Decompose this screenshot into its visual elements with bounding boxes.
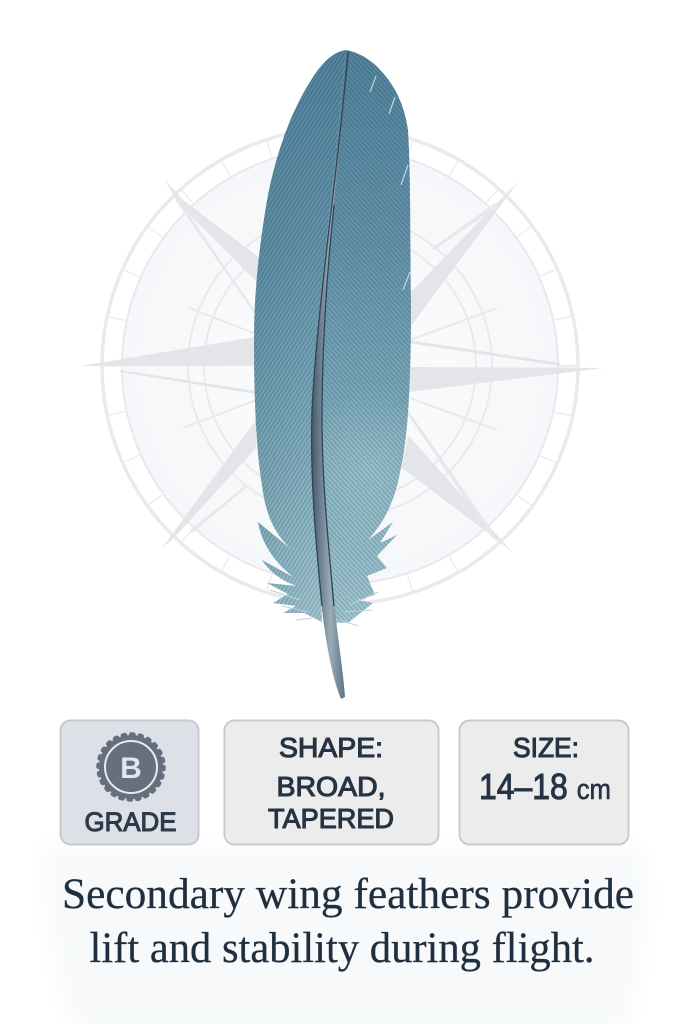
panel: grade card (60, 720, 198, 844)
size text: 14–18 cm (479, 766, 611, 807)
shape text: TAPERED (268, 803, 394, 834)
compass northwest point (165, 180, 262, 318)
caption text: lift and stability during flight. (90, 925, 594, 972)
compass disc (122, 148, 558, 584)
feather illustration (254, 50, 411, 699)
shape text (268, 732, 394, 834)
caption text: Secondary wing feathers provide (62, 871, 634, 918)
white splits in vane (370, 76, 410, 290)
icon: grade B badge: B (120, 752, 142, 785)
shape text: BROAD, (276, 771, 386, 802)
size text: SIZE: (513, 732, 579, 763)
compass minor points (183, 307, 497, 430)
panel: size card (460, 720, 628, 844)
compass rose background (80, 128, 603, 604)
feather shaft (312, 52, 349, 699)
caption text (62, 871, 634, 972)
compass ring ticks (112, 138, 568, 594)
compass inner arcs (188, 214, 492, 518)
panel: shape card (224, 720, 438, 844)
shaft dark edges (312, 52, 348, 606)
base wisps (270, 590, 378, 626)
compass west point (80, 337, 256, 394)
size text (479, 732, 611, 807)
grade label: GRADE (84, 807, 176, 837)
compass northeast point (408, 182, 518, 330)
compass east point (408, 340, 603, 392)
compass southeast point (402, 410, 513, 553)
panel: caption backdrop (43, 846, 646, 1024)
compass southwest point (162, 420, 256, 548)
shape text: SHAPE: (279, 732, 383, 763)
left vane (254, 50, 346, 622)
compass outer ring (102, 128, 578, 604)
right vane (318, 50, 411, 623)
